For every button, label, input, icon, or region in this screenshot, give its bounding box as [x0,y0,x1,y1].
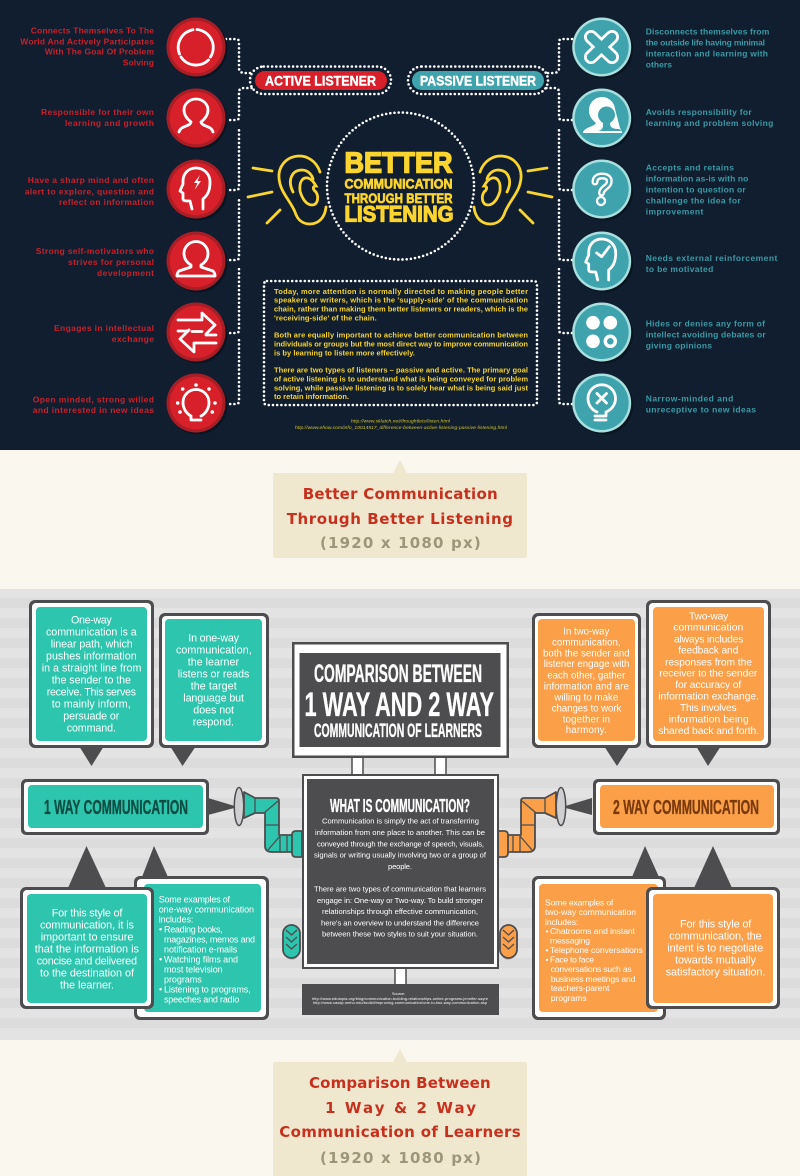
passive listener traits: interaction and learning with [646,48,768,58]
body text: here's an overview to understand the difference [321,918,479,927]
panel: one-way style: to the destination of [40,967,135,979]
dotted connectors [226,39,572,404]
passive listener traits: giving opinions [646,340,712,350]
panel: one-way definition: the sender to the [52,674,131,686]
panel: one-way examples: magazines, memos and [164,935,255,945]
source links: http://www.ehow.com/info_10014517_difference-between-active-listening-passive-listening.html [295,425,508,431]
active listener traits: World And Actively Participates [20,36,154,46]
panel: one-way examples: most television [164,965,223,975]
icon: light bulb [166,374,228,434]
title: better communication through better listening: LISTENING [344,202,454,226]
panel: two-way definition: information being [669,715,749,726]
panel: one-way examples [134,846,269,1020]
text block: introduction: to retain information. [274,392,349,401]
icon: solid person [572,88,633,150]
callout: better communication caption: Better Communication [303,485,498,503]
sign posts [352,757,446,985]
panel: one-way style: For this style of [52,908,123,920]
panel: one-way style: the learner. [60,979,114,991]
icon: head with check [572,232,633,292]
panel: two-way examples: Some examples of [545,898,614,908]
panel: two-way definition: feedback and [678,646,739,657]
body text: engage in: One-way or Two-way. To build stronger [317,896,483,905]
panel: two-way learner [532,613,641,766]
panel: two-way examples: Telephone conversations [550,945,643,955]
passive listener traits: unreceptive to new ideas [646,404,756,414]
active listener traits: Engages in intellectual [54,323,154,333]
body text: relationships through effective communication, [322,907,478,916]
text block: introduction: solving, while passive listening is to solely hear what is being said just [274,383,528,392]
active listener traits: Open minded, strong willed [33,394,154,404]
panel: one-way style: communication, it is [40,920,135,932]
panel: one-way examples: Some examples of [159,895,230,905]
passive listener traits: improvement [646,206,703,216]
passive listener traits: the outside life having minimal [646,38,765,48]
passive listener traits: Needs external reinforcement [646,253,777,263]
active listener traits: exchange [112,334,154,344]
source links [295,418,508,431]
text block: introduction: There are two types of listeners – passive and active. The primary goal [274,366,528,375]
panel: two-way examples: programs [551,993,587,1003]
badge: passive listener [408,66,548,94]
active listener traits: Strong self-motivators who [36,246,154,256]
panel: two-way examples: Chatrooms and instant [550,926,636,936]
body text: between these two styles to suit your situation. [322,929,478,938]
panel: two-way style [646,846,780,1009]
icon: person outline [166,88,228,150]
source links: http://www.sklatch.net/thoughtlets/listen.html [351,418,451,424]
panel: two-way learner: information and are [544,681,629,692]
panel: two-way examples: • [546,926,549,936]
passive listener traits [646,26,777,414]
passive listener traits: Accepts and retains [646,162,734,172]
panel: one-way definition [29,600,154,766]
panel: two-way examples: • [546,945,549,955]
callout: better communication caption [273,460,527,558]
panel: one-way definition: linear path, which [51,638,133,650]
panel: two-way learner: changes to work [552,703,622,714]
panel: one-way learner: does not [193,705,234,717]
icon: right ear [474,156,552,224]
panel: two-way style: For this style of [680,918,752,930]
text block: introduction: Today, more attention is normally directed to making people better [274,287,528,296]
title: better communication through better listening [344,148,454,226]
badge: active listener: ACTIVE LISTENER [265,74,376,88]
text block: introduction: 'receiving-side' of the chain. [274,313,377,322]
body text: Communication is simply the act of transferring [322,816,479,825]
panel: comparison infographic [0,589,800,1040]
source box: http://www.casdp.nmhu.edu/toolkit/improving-communication/one-to-two-way-communication.asp [313,1001,487,1005]
panel: one-way definition: pushes information [46,650,137,662]
badge: passive listener: PASSIVE LISTENER [420,74,536,88]
panel: one-way learner: the target [191,681,237,693]
panel: two-way style: intent is to negotiate [667,942,763,954]
body text: people. [388,862,412,871]
panel: one-way definition: to mainly inform, [52,698,131,710]
source box: Source: [392,992,405,996]
text block: introduction: chain, rather than making them better listeners or readers, which is the [274,304,528,313]
icon: cycle [166,18,228,78]
active listener traits: strives for personal [68,257,154,267]
panel: two-way examples: • [546,954,549,964]
label: 1 way communication: 1 WAY COMMUNICATION [44,797,188,819]
label: 1 way communication [21,779,209,835]
icon: person bust [166,232,228,292]
active listener traits: development [97,268,154,278]
panel: two-way definition: responses from the [665,657,752,668]
panel: one-way examples: • [159,925,162,935]
icon: teal ornament [283,925,301,960]
passive listener traits: learning and problem solving [646,118,773,128]
callout: comparison caption: Communication of Learners [279,1123,521,1141]
panel: two-way examples: conversations such as [551,964,632,974]
panel: one-way examples: Watching films and [164,955,238,965]
panel: two-way definition: receiver to the sender [659,669,758,680]
panel: two-way definition: This involves [680,703,737,714]
source box: http://www.edutopia.org/blog/communication-building-relationships-online-programs-jennifer-sayre [312,997,488,1001]
panel: two-way learner: willing to make [553,692,618,703]
panel: one-way definition: persuade or [63,710,120,722]
megaphone: one way [208,788,302,857]
panel: one-way examples: Listening to programs, [164,985,251,995]
panel: two-way definition: shared back and forth. [658,726,759,737]
megaphone: two way [498,788,592,857]
text block: introduction: individuals or groups but the most direct way to improve communication [274,339,528,348]
icon: four dots [572,302,633,364]
panel: one-way style: important to ensure [41,931,133,943]
panel: one-way examples: Reading books, [164,925,223,935]
panel: one-way examples: • [159,955,162,965]
panel: one-way definition: command. [67,722,116,734]
text block: introduction: Both are equally important to achieve better communication between [274,331,528,340]
active listener traits: Connects Themselves To The [31,26,154,36]
passive listener traits: to be motivated [646,264,713,274]
passive listener traits: intention to question or [646,184,746,194]
panel: what is communication: WHAT IS COMMUNICATION? [330,796,470,816]
panel: two-way learner: together in [563,714,610,725]
body text [314,816,487,938]
active listener traits: reflect on information [59,197,154,207]
panel: two-way definition: for accuracy of [675,680,741,691]
callout: comparison caption: (1920 x 1080 px) [320,1149,481,1167]
text block: introduction: of active listening is to understand what is being conveyed for problem [274,374,528,383]
icon: orange ornament [499,925,517,960]
body text: information from one place to another. This can be [315,828,485,837]
panel: better listening infographic [0,0,800,450]
panel: two-way learner: each other, gather [547,670,626,681]
panel: one-way style: that the information is [35,943,140,955]
title: comparison between 1 way and 2 way: COMPARISON BETWEEN [314,660,482,688]
panel: two-way learner: harmony. [566,725,607,736]
panel: two-way learner: communication, [552,637,621,648]
panel: one-way learner: language but [183,693,244,705]
panel: two-way definition: communication [673,623,744,634]
active listener traits: learning and growth [65,118,154,128]
panel: one-way learner: listens or reads [178,668,249,680]
panel: two-way definition: always includes [674,634,743,645]
panel: one-way style: concise and delivered [37,955,137,967]
active listener traits [20,26,154,415]
callout: comparison caption [273,1049,527,1176]
source box [302,984,499,1015]
title: better communication through better listening: THROUGH BETTER [344,191,453,206]
panel: two-way examples: includes: [545,917,578,927]
panel: one-way examples: includes: [159,915,193,925]
panel: two-way learner: In two-way [563,626,609,637]
icon: bulb with cross [572,374,633,434]
body text: There are two types of communication that learners [314,884,486,893]
panel: two-way style: satisfactory situation. [666,966,765,978]
panel: one-way learner: In one-way [188,633,240,645]
title: better communication through better listening: BETTER [344,148,453,180]
panel: two-way examples: teachers-parent [551,983,610,993]
text block: introduction [264,281,537,405]
title: comparison between 1 way and 2 way: COMMUNICATION OF LEARNERS [314,721,482,742]
callout: better communication caption: Through Better Listening [287,510,513,528]
panel: one-way style [20,846,154,1009]
label: 2 way communication [593,779,780,835]
panel: two-way style: communication, the [669,930,762,942]
text block: introduction: speakers or writers, which is the 'supply-side' of the communication [274,296,528,305]
panel: two-way definition: information exchange. [658,692,759,703]
active listener traits: and interested in new ideas [33,405,154,415]
passive listener traits: information as-is with no [646,174,748,184]
active listener traits: Solving [123,58,154,68]
passive listener traits: others [646,60,672,70]
body text: conveyed through the exchange of speech, visuals, [317,839,484,848]
active listener traits: Have a sharp mind and often [28,175,154,185]
icon: left ear [248,156,326,224]
panel: one-way examples: one-way communication [159,905,254,915]
body text: signals or writing usually involving two or a group of [314,850,487,859]
panel: one-way learner [159,613,269,766]
callout: comparison caption: 1 Way & 2 Way [325,1099,476,1117]
panel: two-way learner: listener engage with [544,659,629,670]
panel: one-way definition: One-way [71,614,112,626]
text block: introduction: is by learning to listen more effectively. [274,348,415,357]
passive listener traits: Narrow-minded and [646,394,733,404]
panel: two-way learner: both the sender and [543,648,630,659]
title: better communication through better listening: COMMUNICATION [344,176,452,192]
panel: one-way definition: receive. This serves [47,686,136,698]
panel: two-way style: towards mutually [675,954,757,966]
callout: better communication caption: (1920 x 1080 px) [320,534,481,552]
panel: two-way examples: two-way communication [545,907,636,917]
badge: active listener [250,66,391,94]
title: comparison between 1 way and 2 way [292,642,509,758]
icon: question mark [572,160,633,220]
panel: one-way definition: communication is a [46,626,137,638]
active listener traits: Responsible for their own [41,107,154,117]
passive listener traits: intellect avoiding debates or [646,330,766,340]
panel: two-way definition: Two-way [689,612,729,623]
passive listener traits: Hides or denies any form of [646,318,765,328]
panel: two-way examples [532,846,666,1020]
panel: two-way examples: messaging [550,936,590,946]
active listener traits: alert to explore, question and [25,186,154,196]
icon: head with lightning [166,160,228,220]
panel: one-way learner: the learner [188,657,239,669]
panel: what is communication [302,774,499,969]
panel: two-way examples: Face to face [550,954,594,964]
panel: two-way definition [646,600,771,766]
icon: cross [572,18,633,78]
panel: one-way examples: programs [164,975,202,985]
passive listener traits: Avoids responsibility for [646,107,752,117]
panel: one-way examples: notification e-mails [164,945,238,955]
active listener traits: With The Goal Of Problem [45,46,154,56]
panel: one-way examples: • [159,985,162,995]
panel: two-way examples: business meetings and [551,974,636,984]
icon: exchange arrows [166,302,228,364]
panel: one-way definition: in a straight line from [42,662,141,674]
title: comparison between 1 way and 2 way: 1 WAY AND 2 WAY [304,686,494,724]
panel: one-way examples: speeches and radio [164,995,239,1005]
passive listener traits: challenge the idea for [646,196,741,206]
panel: one-way learner: respond. [193,717,234,729]
callout: comparison caption: Comparison Between [309,1074,491,1092]
center dotted circle [327,112,474,260]
panel: one-way learner: communication, [176,645,252,657]
passive listener traits: Disconnects themselves from [646,26,770,36]
